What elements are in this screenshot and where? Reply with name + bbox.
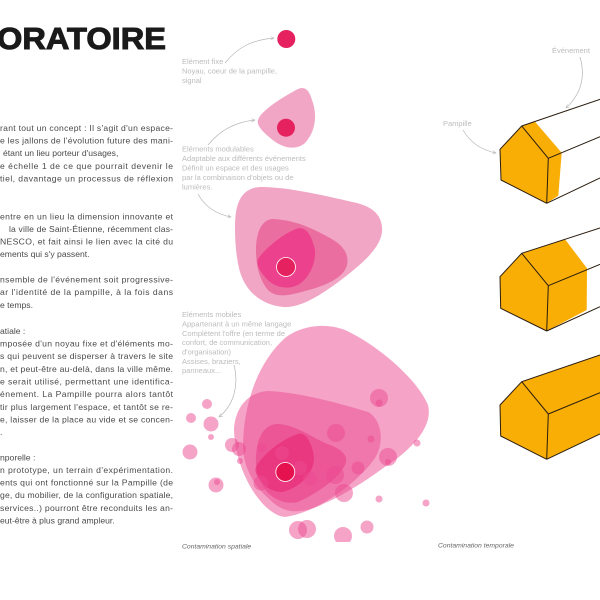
text block: contamination temporelle — [0, 452, 173, 525]
text block: contamination spatiale: n, et peut-être au-delà, dans la ville même. — [0, 364, 173, 374]
icon: fixed element — [277, 30, 295, 48]
arrow: mobile elements — [219, 365, 236, 417]
text block: lieu: la ville de Saint-Étienne, récemment clas- — [9, 224, 173, 234]
diagram: house 3 — [500, 355, 600, 459]
label: mobile elements: Assises, braziers, — [182, 357, 241, 366]
text block: progression: e temps. — [0, 300, 33, 310]
label: mobile elements: confort, de communication, — [182, 338, 272, 347]
text block: contamination spatiale — [0, 326, 174, 437]
label: modular elements: Définit un espace et des usages — [182, 163, 289, 172]
text block: contamination temporelle: nporelle : — [0, 452, 35, 462]
label: mobile elements: Appartenant à un même langage — [182, 320, 291, 328]
diagram: composed blobs — [235, 187, 382, 307]
label: modular elements: lumières. — [182, 182, 212, 192]
label: mobile elements: panneaux... — [182, 366, 221, 375]
caption: temporal contamination: Contamination temporale — [438, 543, 514, 550]
label: modular elements: Adaptable aux différents événements — [182, 154, 306, 163]
text block: contamination spatiale: e serait utilisé, permettant une identifica- — [0, 377, 173, 387]
text block: contamination spatiale: s qui peuvent se disperser à travers le site — [0, 351, 173, 361]
diagram: spatial contamination — [182, 326, 430, 545]
label: modular elements: Eléments modulables — [182, 145, 254, 154]
text block: contamination spatiale: . — [0, 427, 2, 437]
text block: contamination temporelle: ge, du mobilier, de la configuration spatiale, — [0, 490, 173, 500]
arrow: fixed element — [225, 38, 274, 63]
arrow: modular to composed blob — [198, 194, 231, 217]
text block: lieu: ements qui s'y passent. — [0, 249, 90, 259]
text block: concept: étant un lieu porteur d'usages, — [3, 148, 118, 158]
label: fixed element: Elément fixe — [182, 57, 223, 66]
text block: contamination temporelle: ents qui ont fonctionné sur la Pampille (de — [0, 478, 173, 488]
text block: contamination spatiale: mposée d'un noyau fixe et d'éléments mo- — [0, 339, 173, 349]
text block: lieu: entre en un lieu la dimension innovante et — [0, 211, 174, 221]
text block: contamination spatiale: énement. La Pampille pourra alors tantôt — [0, 389, 174, 399]
text block: progression: nsemble de l'événement soit progressive- — [0, 275, 173, 285]
diagram: house 2 — [500, 228, 600, 331]
label: mobile elements: Eléments mobiles — [182, 310, 241, 319]
text block: contamination temporelle: eut-être à plus grand ampleur. — [0, 515, 115, 525]
label: mobile elements: d'organisation) — [182, 348, 231, 356]
label: fixed element: signal — [182, 76, 202, 85]
text block: progression — [0, 275, 173, 310]
label: event: Événement — [552, 46, 591, 55]
label: modular elements: par la combinaison d'objets ou de — [182, 173, 294, 182]
label: fixed element: Noyau, coeur de la pampille, — [182, 66, 277, 76]
text block: concept — [0, 123, 173, 184]
label: mobile elements — [182, 310, 291, 375]
title: ORATOIRE — [0, 21, 166, 56]
label: modular elements — [182, 145, 306, 192]
arrow: event — [566, 57, 582, 108]
arrow: modular element to blob — [208, 120, 255, 145]
text block: concept: tiel, davantage un processus de réflexion — [0, 174, 173, 184]
label: pampille: Pampille — [443, 119, 472, 128]
text block: progression: ar l'identité de la pampille, à la fois dans — [0, 287, 173, 297]
text block: contamination temporelle: n prototype, un terrain d'expérimentation. — [0, 465, 173, 475]
diagram: modular element — [258, 88, 315, 148]
text block: lieu: NESCO, et fait ainsi le lien avec la cité du — [0, 237, 173, 247]
text block: concept: rant tout un concept : Il s'agit d'un espace- — [0, 123, 173, 133]
diagram: house 1 — [500, 99, 600, 203]
text block: concept: e les jallons de l'évolution future des mani- — [0, 136, 173, 146]
label: mobile elements: Complètent l'offre (en terme de — [182, 329, 285, 338]
text block: contamination spatiale: tir plus largement l'espace, et tantôt se re- — [0, 402, 173, 412]
text block: contamination spatiale: atiale : — [0, 326, 25, 336]
label: fixed element — [182, 57, 277, 85]
text block: contamination spatiale: e, laisser de la place au vide et se concen- — [0, 414, 173, 424]
text block: concept: e échelle 1 de ce que pourrait devenir le — [0, 161, 173, 171]
text block: lieu — [0, 211, 174, 259]
arrow: pampille — [463, 130, 496, 153]
caption: spatial contamination: Contamination spatiale — [182, 544, 251, 551]
text block: contamination temporelle: services..) pourront être reconduits les an- — [0, 503, 173, 513]
